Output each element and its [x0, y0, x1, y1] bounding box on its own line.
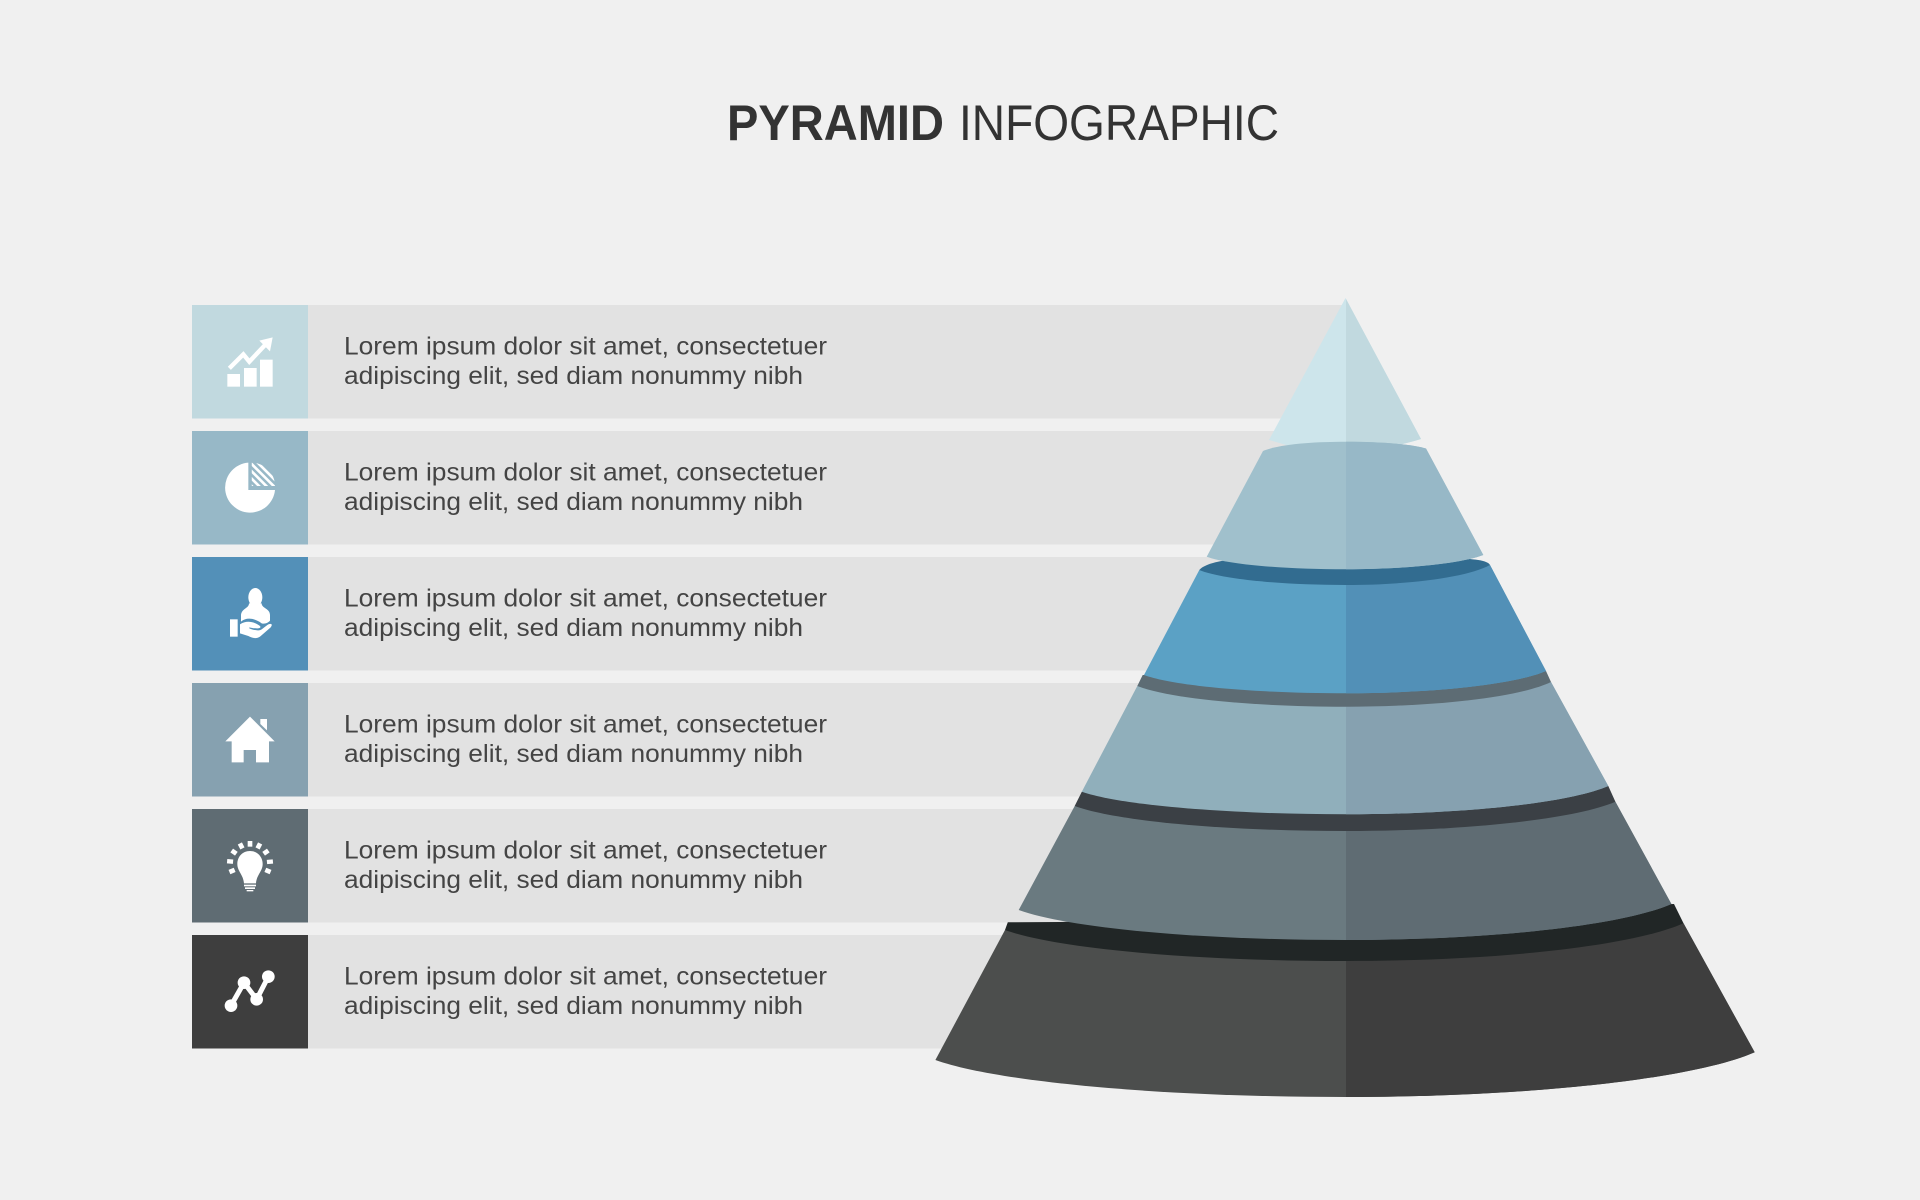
icon: light bulb: [227, 841, 273, 891]
row 5 icon tile: [192, 809, 308, 922]
row 1: [192, 305, 1345, 418]
title: INFOGRAPHIC: [959, 95, 1279, 151]
row 1 text: Lorem ipsum dolor sit amet, consectetuer: [344, 332, 827, 360]
row 1 text: [344, 332, 827, 390]
row 5 text: adipiscing elit, sed diam nonummy nibh: [344, 866, 803, 894]
icon: growth chart: [227, 337, 273, 387]
icon: person on hand: [230, 588, 272, 638]
row 5 text: Lorem ipsum dolor sit amet, consectetuer: [344, 836, 827, 864]
pyramid tier 1: [1269, 298, 1421, 447]
pyramid tier 6: [935, 904, 1755, 1097]
row 4 text: adipiscing elit, sed diam nonummy nibh: [344, 740, 803, 768]
icon: line graph: [225, 970, 275, 1012]
row 2 icon tile: [192, 431, 308, 544]
row 3 text: adipiscing elit, sed diam nonummy nibh: [344, 614, 803, 642]
row 2 text: adipiscing elit, sed diam nonummy nibh: [344, 488, 803, 516]
row 2 text: [344, 458, 827, 516]
row 2 text: Lorem ipsum dolor sit amet, consectetuer: [344, 458, 827, 486]
row 6 panel: [192, 935, 1345, 1048]
title: PYRAMID: [727, 95, 944, 151]
row 1 text: adipiscing elit, sed diam nonummy nibh: [344, 362, 803, 390]
row 3 icon tile: [192, 557, 308, 670]
row 6 text: Lorem ipsum dolor sit amet, consectetuer: [344, 962, 827, 990]
row 4: [192, 683, 1345, 796]
row 2 panel: [192, 431, 1345, 544]
pyramid tier 3: [1144, 558, 1546, 693]
row 1 panel: [192, 305, 1345, 418]
row 3 text: Lorem ipsum dolor sit amet, consectetuer: [344, 584, 827, 612]
row 6 text: adipiscing elit, sed diam nonummy nibh: [344, 992, 803, 1020]
title: [727, 95, 1279, 151]
pyramid tier 5: [1019, 786, 1671, 940]
row 5 panel: [192, 809, 1345, 922]
row 4 text: Lorem ipsum dolor sit amet, consectetuer: [344, 710, 827, 738]
pyramid tier 4: [1082, 671, 1608, 814]
row 6 text: [344, 962, 827, 1020]
row 4 panel: [192, 683, 1345, 796]
row 3 panel: [192, 557, 1345, 670]
row 4 icon tile: [192, 683, 308, 796]
row 3 text: [344, 584, 827, 642]
row 5 text: [344, 836, 827, 894]
row 4 text: [344, 710, 827, 768]
row 2: [192, 431, 1345, 544]
row 6 icon tile: [192, 935, 308, 1048]
pyramid tier 2: [1207, 442, 1483, 569]
row 3: [192, 557, 1345, 670]
row 6: [192, 935, 1345, 1048]
row 1 icon tile: [192, 305, 308, 418]
row 5: [192, 809, 1345, 922]
pyramid: [935, 298, 1755, 1097]
icon: pie chart: [225, 462, 275, 513]
icon: house: [225, 717, 275, 762]
